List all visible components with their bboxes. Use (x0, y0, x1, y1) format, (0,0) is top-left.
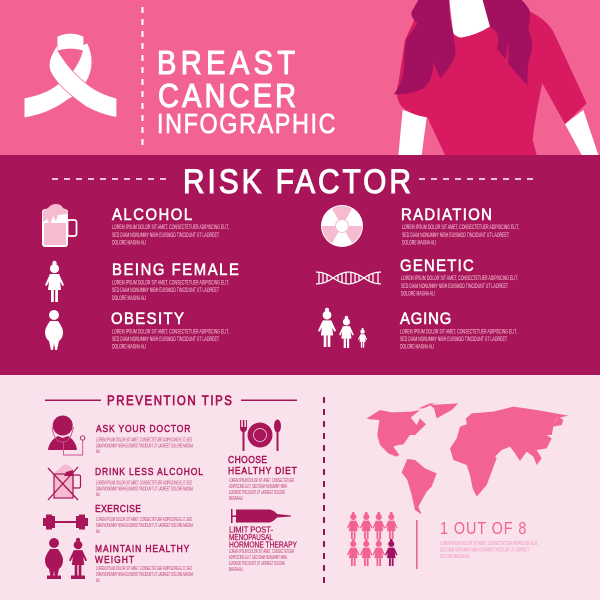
risk item: radiation: RADIATION (401, 206, 492, 224)
icon: plate and cutlery (240, 420, 281, 451)
tip: limit hormone therapy: LIMIT POST- (229, 526, 273, 534)
tip: maintain healthy weight: WEIGHT (95, 554, 134, 565)
tip: ask your doctor: ASK YOUR DOCTOR (96, 423, 191, 434)
heading: risk factor: RISK FACTOR (183, 162, 411, 200)
risk item: aging: DOLORE MAGNA ALI (400, 344, 434, 350)
risk item: genetic: DOLORE MAGNA ALI (401, 290, 435, 298)
tip: choose healthy diet: ADIPISCING ELIT, SED DIAM NONUMMY NIBH (229, 484, 287, 490)
risk item: being female: DOLORE MAGNA ALI (112, 295, 146, 302)
stat description: DOLORE MAGNA ALI (440, 554, 470, 560)
heading: prevention tips: PREVENTION TIPS (107, 393, 232, 408)
risk item: obesity: DOLORE MAGNA ALI (112, 344, 146, 350)
tip: choose healthy diet: EUISMOD TINCIDUNT UT LAOREET DOLORE (229, 490, 285, 496)
tip: maintain healthy weight: LOREM IPSUM DOLOR SIT AMET, CONSECTETUER ADIPISCING ELIT, SED (96, 566, 192, 572)
tip: choose healthy diet: MAGNA ALI (229, 496, 243, 502)
tip: limit hormone therapy: HORMONE THERAPY (229, 540, 298, 550)
title (157, 44, 336, 139)
risk item: being female (45, 261, 239, 302)
risk item: radiation: SED DIAM NONUMMY NIBH EUISMOD TINCIDUNT UT LAOREET (402, 232, 509, 239)
stat description: SED DIAM NONUMMY NIBH EUISMOD TINCIDUNT UT LAOREET (440, 548, 529, 554)
icon: crossed mug (48, 464, 80, 500)
tip: ask your doctor: LOREM IPSUM DOLOR SIT AMET, CONSECTETUER ADIPISCING ELIT, SED (96, 438, 192, 444)
icon: pink ribbon (24, 34, 117, 117)
risk item: aging: SED DIAM NONUMMY NIBH EUISMOD TINCIDUNT UT LAOREET (400, 336, 507, 343)
dashed vertical divider (323, 397, 325, 584)
tip: exercise: ALI (96, 529, 100, 535)
tip: maintain healthy weight: DIAM NONUMMY NIBH EUISMOD TINCIDUNT UT LAOREET DOLORE MAGNA (96, 572, 193, 578)
risk item: obesity: SED DIAM NONUMMY NIBH EUISMOD TINCIDUNT UT LAOREET (112, 336, 219, 343)
risk item: genetic: GENETIC (400, 257, 474, 275)
tip: limit hormone therapy: ADIPISCING ELIT, SED DIAM NONUMMY NIBH (229, 555, 287, 561)
risk item: being female: SED DIAM NONUMMY NIBH EUISMOD TINCIDUNT UT LAOREET (112, 287, 219, 294)
dashes right (419, 178, 535, 180)
icon: woman (45, 261, 64, 302)
tip: limit hormone therapy (229, 509, 298, 573)
panel: prevention tips (0, 375, 600, 600)
risk item: being female: LOREM IPSUM DOLOR SIT AMET, CONSECTETUER ADIPISCING ELIT, (112, 280, 229, 286)
tip: choose healthy diet: HEALTHY DIET (228, 465, 297, 476)
stat: 1 out of 8: 1 OUT OF 8 (440, 519, 526, 538)
dashed divider (142, 7, 144, 147)
heading rule right (241, 400, 297, 401)
title: INFOGRAPHIC (157, 109, 336, 139)
risk item: obesity (45, 310, 229, 350)
tip: maintain healthy weight (45, 538, 193, 584)
tip: ask your doctor: ALI (96, 449, 100, 455)
risk item: alcohol: DOLORE MAGNA ALI (112, 240, 146, 246)
tip: maintain healthy weight: ALI (96, 578, 100, 584)
risk item: genetic: LOREM IPSUM DOLOR SIT AMET, CONSECTETUER ADIPISCING ELIT, (401, 275, 518, 282)
risk item: aging: LOREM IPSUM DOLOR SIT AMET, CONSECTETUER ADIPISCING ELIT, (400, 328, 517, 336)
risk item: radiation (321, 205, 519, 247)
tip: exercise: LOREM IPSUM DOLOR SIT AMET, CONSECTETUER ADIPISCING ELIT, SED (96, 517, 192, 523)
risk item: aging (318, 308, 517, 350)
risk item: being female: BEING FEMALE (112, 261, 239, 279)
risk item: alcohol (42, 204, 229, 247)
icon: doctor (48, 416, 85, 455)
title: CANCER (158, 77, 296, 114)
tip: drink less alcohol: LOREM IPSUM DOLOR SIT AMET, CONSECTETUER ADIPISCING ELIT, SED (96, 480, 192, 486)
tip: limit hormone therapy: MENOPAUSAL (229, 533, 273, 542)
risk item: alcohol: ALCOHOL (112, 206, 192, 224)
risk item: alcohol: SED DIAM NONUMMY NIBH EUISMOD TINCIDUNT UT LAOREET (112, 232, 219, 239)
risk item: obesity: OBESITY (111, 310, 184, 328)
tip: choose healthy diet (228, 420, 297, 502)
risk item: radiation: LOREM IPSUM DOLOR SIT AMET, CONSECTETUER ADIPISCING ELIT, (402, 224, 519, 231)
tip: limit hormone therapy: MAGNA ALI (229, 567, 243, 573)
tip: limit hormone therapy: EUISMOD TINCIDUNT UT LAOREET DOLORE (229, 561, 285, 567)
tip: ask your doctor: DIAM NONUMMY NIBH EUISMOD TINCIDUNT UT LAOREET DOLORE MAGNA (96, 444, 193, 450)
tip: choose healthy diet: CHOOSE (228, 454, 267, 465)
tip: choose healthy diet: LOREM IPSUM DOLOR SIT AMET, CONSECTETUER (229, 478, 294, 484)
panel: world statistics (347, 403, 568, 569)
dashes left (52, 178, 168, 180)
stat description (440, 541, 538, 560)
tip: drink less alcohol: ALI (96, 492, 100, 498)
icon: beer mug (42, 204, 76, 247)
risk item: alcohol: LOREM IPSUM DOLOR SIT AMET, CONSECTETUER ADIPISCING ELIT, (112, 224, 229, 231)
tip: drink less alcohol: DRINK LESS ALCOHOL (95, 466, 203, 477)
icon: radiation (321, 205, 363, 247)
tip: exercise: EXERCISE (95, 503, 141, 514)
risk item: genetic: SED DIAM NONUMMY NIBH EUISMOD TINCIDUNT UT LAOREET (401, 283, 508, 290)
tip: drink less alcohol (48, 464, 203, 500)
risk item: aging: AGING (400, 310, 451, 328)
tip: drink less alcohol: DIAM NONUMMY NIBH EUISMOD TINCIDUNT UT LAOREET DOLORE MAGNA (96, 486, 193, 492)
stat divider (416, 520, 418, 569)
risk item: obesity: LOREM IPSUM DOLOR SIT AMET, CONSECTETUER ADIPISCING ELIT, (112, 328, 229, 336)
risk item: genetic (316, 257, 518, 298)
icon: three generations (318, 308, 367, 348)
icon: dna helix (316, 272, 381, 284)
tip: exercise (43, 503, 193, 535)
heading rule left (45, 400, 101, 401)
icon: body shapes (45, 538, 87, 579)
title: BREAST (157, 44, 295, 81)
tip: exercise: DIAM NONUMMY NIBH EUISMOD TINCIDUNT UT LAOREET DOLORE MAGNA (96, 523, 193, 529)
icon: barbell (43, 514, 88, 530)
risk item: radiation: DOLORE MAGNA ALI (402, 240, 436, 246)
panel: risk factor (0, 155, 600, 375)
pictogram: 1 in 8 women (347, 512, 398, 566)
illustration: woman (394, 0, 598, 155)
header panel (0, 0, 600, 155)
world map (367, 403, 568, 514)
tip: limit hormone therapy: LOREM IPSUM DOLOR SIT AMET, CONSECTETUER (229, 549, 294, 555)
icon: obese woman (45, 310, 63, 350)
tip: maintain healthy weight: MAINTAIN HEALTHY (95, 543, 189, 554)
icon: syringe (231, 509, 291, 523)
tip: ask your doctor (48, 416, 193, 455)
